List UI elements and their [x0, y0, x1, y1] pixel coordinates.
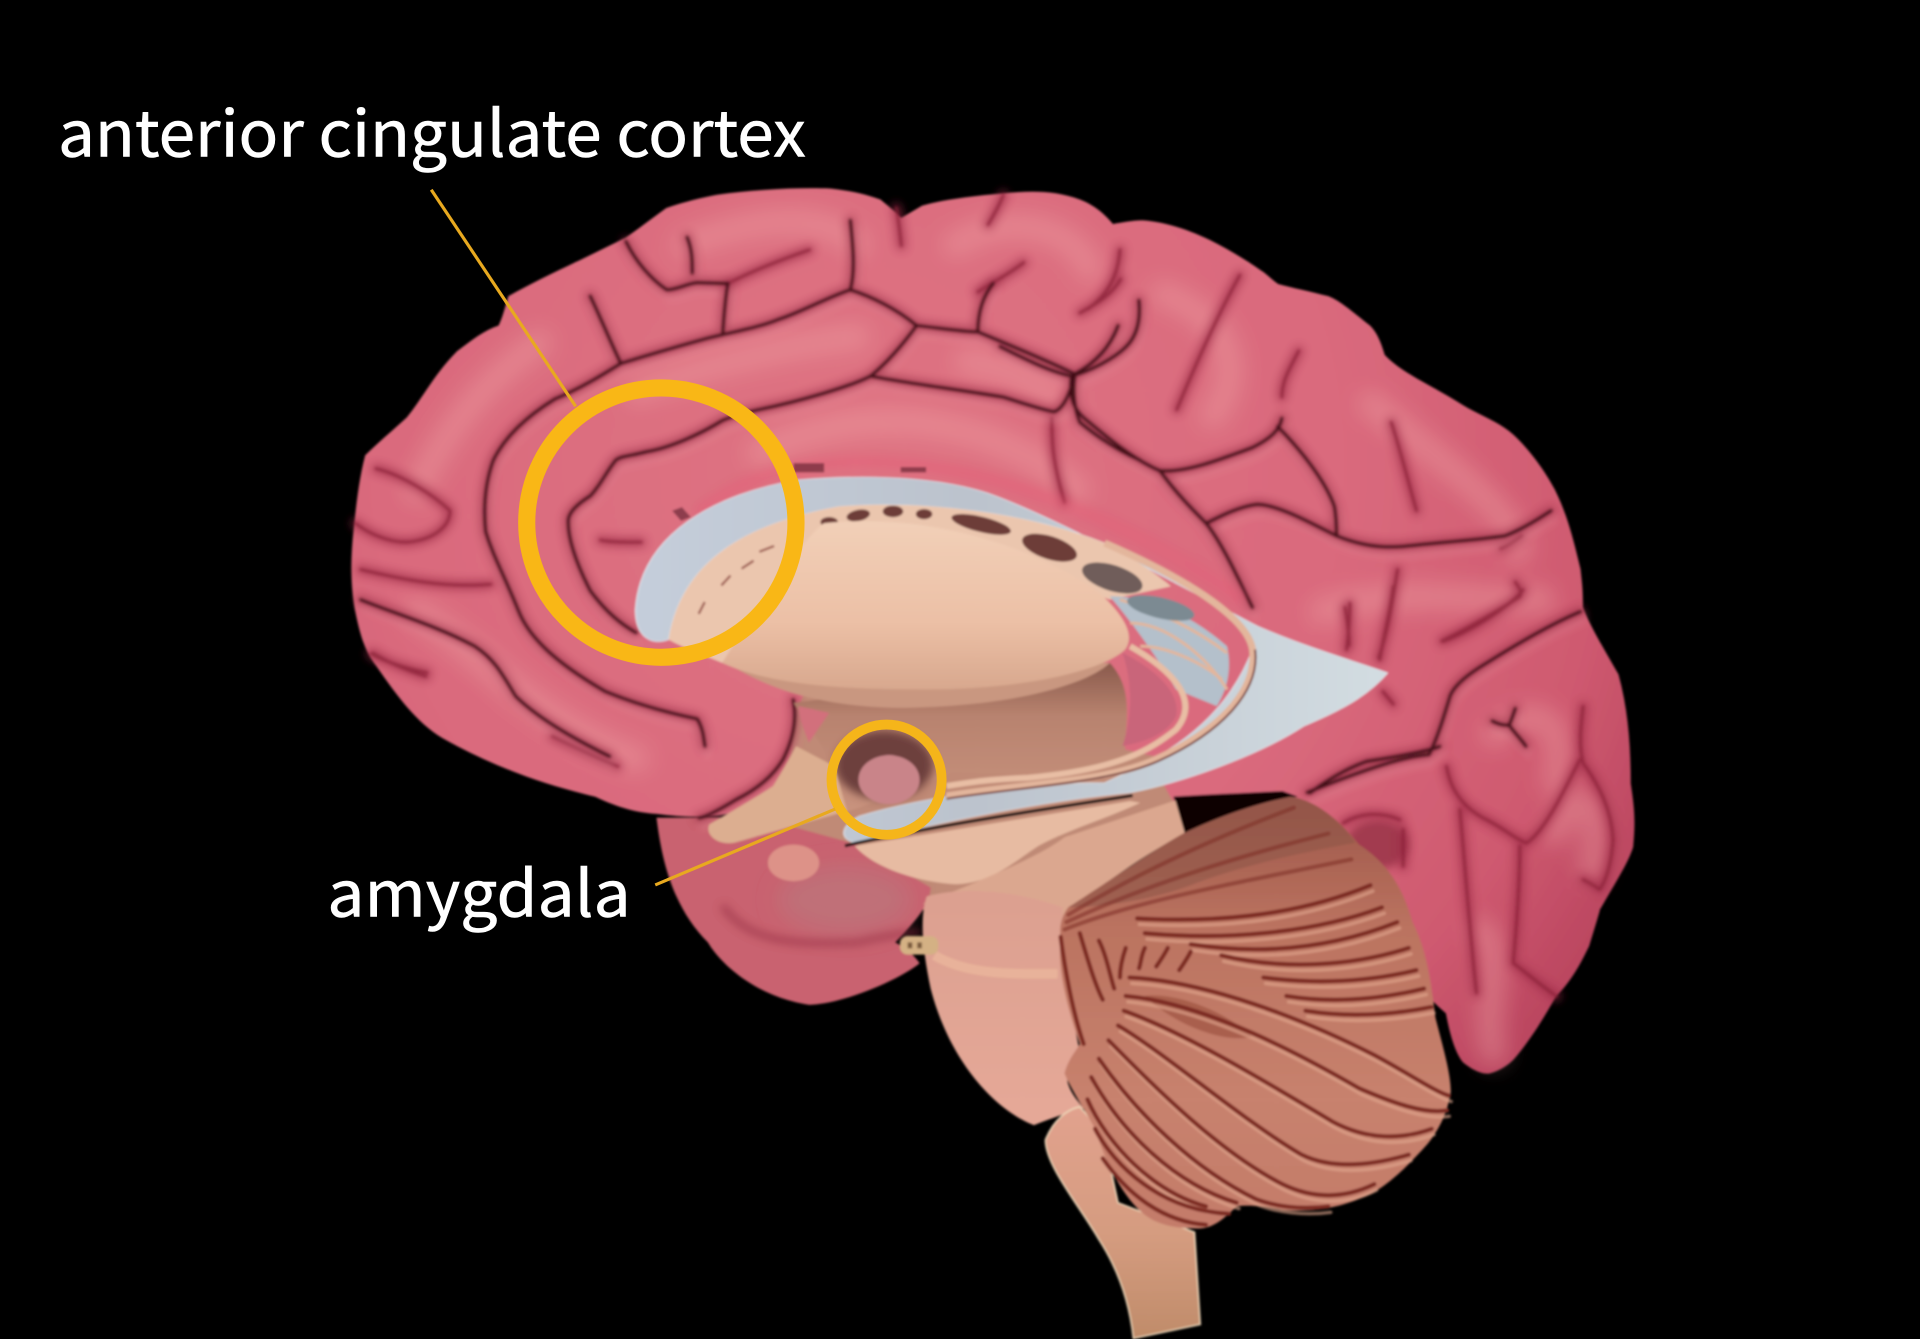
pocket shading beside cerebellum — [1346, 820, 1409, 869]
cerebellum — [1060, 797, 1451, 1229]
lower white-matter lobe — [855, 801, 1140, 884]
label: amygdala: amygdala — [327, 844, 631, 936]
fornix and ventricle — [635, 477, 1388, 843]
cerebellar folia highlights — [1090, 891, 1451, 1214]
gyrus highlights — [417, 222, 1595, 1053]
brain illustration — [351, 188, 1634, 1339]
amygdala — [858, 755, 920, 804]
highlight ring: anterior cingulate cortex — [527, 388, 796, 657]
leader line: anterior cingulate cortex — [431, 190, 576, 406]
thalamus lower lip — [727, 663, 1110, 708]
medulla and spinal cord — [1045, 1107, 1200, 1339]
pink notch beside frontal lobe — [799, 706, 829, 743]
peach band with slots — [669, 505, 1256, 799]
pink strip above fornix — [698, 462, 1243, 600]
interior backdrop — [772, 685, 1182, 912]
pink cavity — [1122, 653, 1177, 746]
cortical sulci — [356, 195, 1613, 996]
midbrain — [923, 800, 1185, 918]
olfactory tract — [708, 746, 847, 843]
dark gap under the fornix tail — [1174, 791, 1298, 834]
cerebral cortex — [351, 188, 1634, 1074]
dark marks above fornix — [672, 463, 926, 521]
temporal lobe — [656, 818, 931, 1005]
dark pocket around amygdala — [835, 731, 933, 799]
thalamus — [722, 521, 1129, 689]
leader line: amygdala — [655, 809, 835, 885]
cerebellar folia grooves — [1061, 808, 1449, 1225]
black line under fornix band — [845, 796, 1133, 846]
hypothalamus region — [794, 663, 1161, 813]
pons — [923, 891, 1084, 1125]
highlight ring: amygdala — [831, 725, 942, 835]
label: anterior cingulate cortex: anterior cingulate cortex — [58, 84, 806, 176]
small lobe below tract — [768, 845, 819, 881]
optic nerve and stalk — [900, 936, 1058, 974]
